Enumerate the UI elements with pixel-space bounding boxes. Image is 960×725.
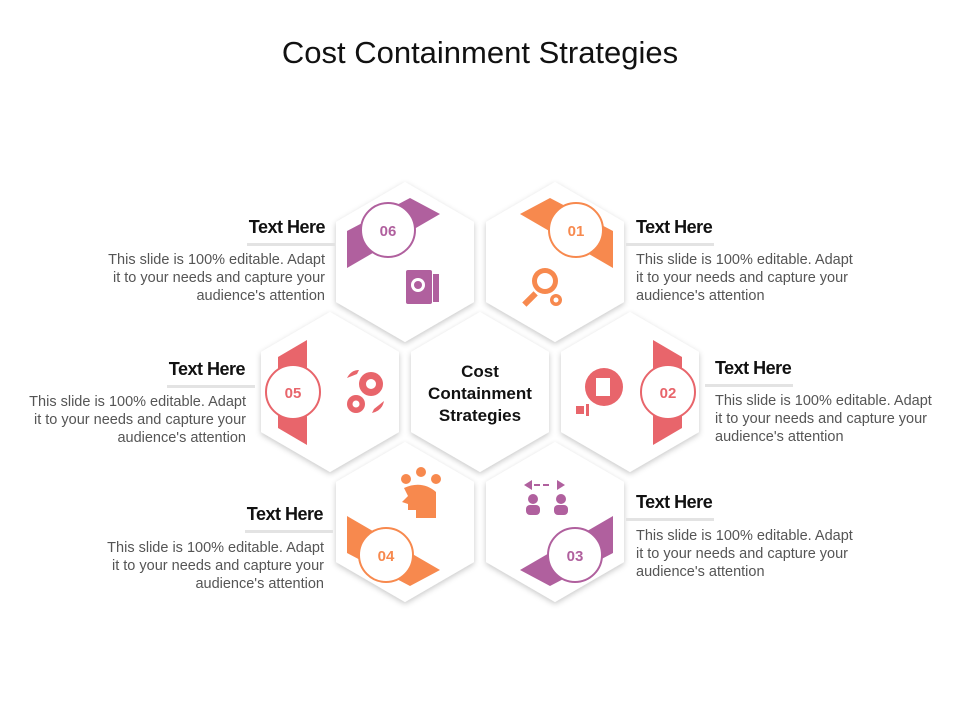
hexagon: 04 bbox=[336, 442, 474, 602]
badge 03 bbox=[548, 528, 602, 582]
badge 02: 02 bbox=[660, 385, 676, 402]
icon: gears bbox=[347, 370, 384, 413]
ribbon 01 bbox=[520, 198, 613, 268]
title: Cost Containment Strategies bbox=[282, 35, 678, 70]
center hexagon bbox=[411, 312, 549, 472]
hexagon: 01 bbox=[486, 182, 624, 342]
text block 02: audience's attention bbox=[715, 429, 844, 445]
text block 03: This slide is 100% editable. Adapt bbox=[636, 528, 853, 544]
hexagon: 03 bbox=[486, 442, 624, 602]
text block 02 bbox=[705, 358, 932, 445]
icon: head with network bbox=[401, 467, 441, 518]
text block 05: This slide is 100% editable. Adapt bbox=[29, 394, 246, 410]
text block 06: it to your needs and capture your bbox=[113, 270, 325, 286]
badge 05: 05 bbox=[285, 385, 301, 402]
text block 06: This slide is 100% editable. Adapt bbox=[108, 252, 325, 268]
text block 04: This slide is 100% editable. Adapt bbox=[107, 540, 324, 556]
text block 06: Text Here bbox=[249, 217, 325, 237]
text block 01: Text Here bbox=[636, 217, 713, 237]
center hexagon: Cost bbox=[461, 362, 499, 381]
text block 03: audience's attention bbox=[636, 564, 765, 580]
text block 01: This slide is 100% editable. Adapt bbox=[636, 252, 853, 268]
text block 05: Text Here bbox=[169, 359, 245, 379]
text block 03: Text Here bbox=[636, 492, 713, 512]
ribbon 04 bbox=[347, 516, 440, 586]
badge 06: 06 bbox=[380, 223, 396, 240]
hexagon: 02 bbox=[561, 312, 699, 472]
badge 02 bbox=[641, 365, 695, 419]
icon: checklist bbox=[576, 368, 623, 416]
center hexagon: Containment bbox=[428, 384, 532, 403]
hexagon: 05 bbox=[261, 312, 399, 472]
text block 04: audience's attention bbox=[195, 576, 324, 592]
ribbon 06 bbox=[347, 198, 440, 268]
text block 04: it to your needs and capture your bbox=[112, 558, 324, 574]
text block 05: it to your needs and capture your bbox=[34, 412, 246, 428]
badge 03: 03 bbox=[567, 548, 583, 565]
badge 01 bbox=[549, 203, 603, 257]
icon: document search bbox=[406, 270, 439, 304]
text block 03: it to your needs and capture your bbox=[636, 546, 848, 562]
ribbon 03 bbox=[520, 516, 613, 586]
text block 02: Text Here bbox=[715, 358, 792, 378]
text block 01 bbox=[626, 217, 853, 304]
badge 04: 04 bbox=[378, 548, 395, 565]
text block 01: audience's attention bbox=[636, 288, 765, 304]
badge 01: 01 bbox=[568, 223, 584, 240]
text block 04: Text Here bbox=[247, 504, 323, 524]
badge 04 bbox=[359, 528, 413, 582]
ribbon 02 bbox=[653, 340, 682, 445]
badge 05 bbox=[266, 365, 320, 419]
text block 05 bbox=[29, 359, 255, 446]
hexagon: 06 bbox=[336, 182, 474, 342]
text block 04 bbox=[107, 504, 333, 592]
text block 06: audience's attention bbox=[196, 288, 325, 304]
badge 06 bbox=[361, 203, 415, 257]
center hexagon: Strategies bbox=[439, 406, 521, 425]
text block 01: it to your needs and capture your bbox=[636, 270, 848, 286]
text block 02: This slide is 100% editable. Adapt bbox=[715, 393, 932, 409]
text block 05: audience's attention bbox=[117, 430, 246, 446]
icon: people exchange bbox=[524, 480, 568, 515]
text block 03 bbox=[626, 492, 853, 580]
text block 02: it to your needs and capture your bbox=[715, 411, 927, 427]
ribbon 05 bbox=[278, 340, 307, 445]
icon: magnifier gear bbox=[522, 268, 562, 307]
text block 06 bbox=[108, 217, 335, 304]
